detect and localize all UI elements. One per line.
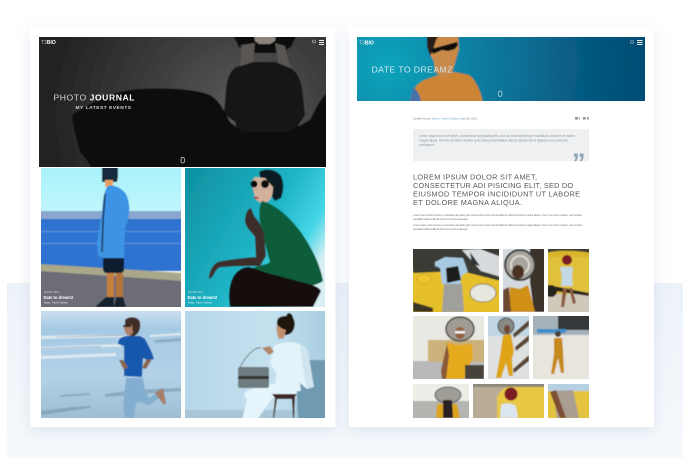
article hero title: DATE TO DREAMZ: [372, 64, 453, 74]
scroll icon: [181, 158, 184, 163]
share icons: [575, 117, 589, 120]
article paragraphs: Lorem ipsum dolor sit amet, consectetur ad pisicing elit, sed do eiusmod tempor incididunt ut labore et dolore magna aliqua. Ut enim ad minim veniam, quis nostrud: [413, 213, 582, 217]
article hero: [355, 35, 647, 103]
photo: woman full length: [533, 316, 589, 379]
background band: [7, 283, 683, 458]
article heading: ET DOLORE MAGNA ALIQUA.: [413, 198, 522, 207]
photo: woman by yellow car: [548, 249, 589, 312]
hero subtitle: MY LATEST EVENTS: [76, 105, 132, 111]
tile caption 1: [44, 291, 74, 304]
article logo: T3BIO: [359, 40, 374, 46]
tile caption 2: Date to dream3: [188, 295, 218, 300]
article heading: LOREM IPSUM DOLOR SIT AMET,: [413, 172, 537, 182]
photo: yellow car with bag: [413, 249, 499, 312]
article paragraphs: [413, 213, 582, 231]
photo: woman in yellow dress: [413, 316, 484, 379]
photo: woman from behind: [413, 384, 469, 418]
blockquote: [413, 129, 589, 178]
tile caption 1: April 28, 2021: [44, 291, 59, 294]
photo: yellow car detail: [548, 384, 589, 418]
tile: man running on beach: [39, 309, 183, 420]
hero menu icons: [312, 40, 324, 45]
blockquote: Lorem ipsum dolor sit amet, consectetur ad pisicing elit, sed do eiusmod tempor incididunt ut labore et dolore: [419, 134, 575, 138]
photo: red hair and yellow car: [473, 384, 544, 418]
photo: woman on stairs: [488, 316, 529, 379]
tile: man in blue raincoat: [39, 166, 183, 309]
article heading: EIUSMOD TEMPOR INCIDIDUNT UT LABORE: [413, 190, 580, 198]
article meta: Sundlee Davis | Music | Travel | Fashion | April 28, 2021: [413, 116, 478, 120]
tile caption 2: Music, Travel, Fashion: [188, 302, 213, 304]
tile: woman with handbag: [183, 309, 327, 420]
tile caption 1: Date to dream3: [44, 295, 74, 300]
article heading: [413, 172, 580, 207]
article paragraphs: Lorem ipsum dolor sit amet, consectetur ad pisicing elit, sed do eiusmod tempor incididunt ut labore et dolore magna aliqua. Ut enim ad minim veniam, quis nostrud: [413, 223, 582, 227]
tile: woman in green jacket: [183, 166, 327, 309]
article heading: CONSECTETUR ADI PISICING ELIT, SED DO: [413, 181, 573, 190]
tile caption 2: April 28, 2021: [188, 291, 203, 294]
panel: photo journal page: [30, 27, 347, 427]
article paragraphs: exercitation ullamco laboris nisi ut commodo consequat.: [413, 217, 468, 221]
tile caption 2: [188, 291, 218, 304]
hero: photo journal: [39, 37, 326, 167]
article paragraphs: exercitation ullamco laboris nisi ut commodo consequat.: [413, 227, 468, 231]
tile caption 1: Music, Travel, Fashion: [44, 302, 69, 304]
scroll icon: [498, 91, 502, 96]
panel: date to dreamz article page: [349, 27, 654, 427]
blockquote: magna aliqua. Ut enim ad minim veniam, quis nostrud exercitation ullamco laboris nisi ut aliquip ex ea commodo: [419, 138, 568, 142]
photo gallery: [411, 247, 591, 420]
blockquote: consequat.: [419, 143, 435, 147]
hero logo: T3BIO: [41, 40, 56, 46]
quote mark: ”: [572, 148, 586, 178]
hero title: PHOTO JOURNAL: [54, 92, 134, 102]
photo: woman in striped hat: [503, 249, 544, 312]
article menu icons: [630, 40, 642, 45]
